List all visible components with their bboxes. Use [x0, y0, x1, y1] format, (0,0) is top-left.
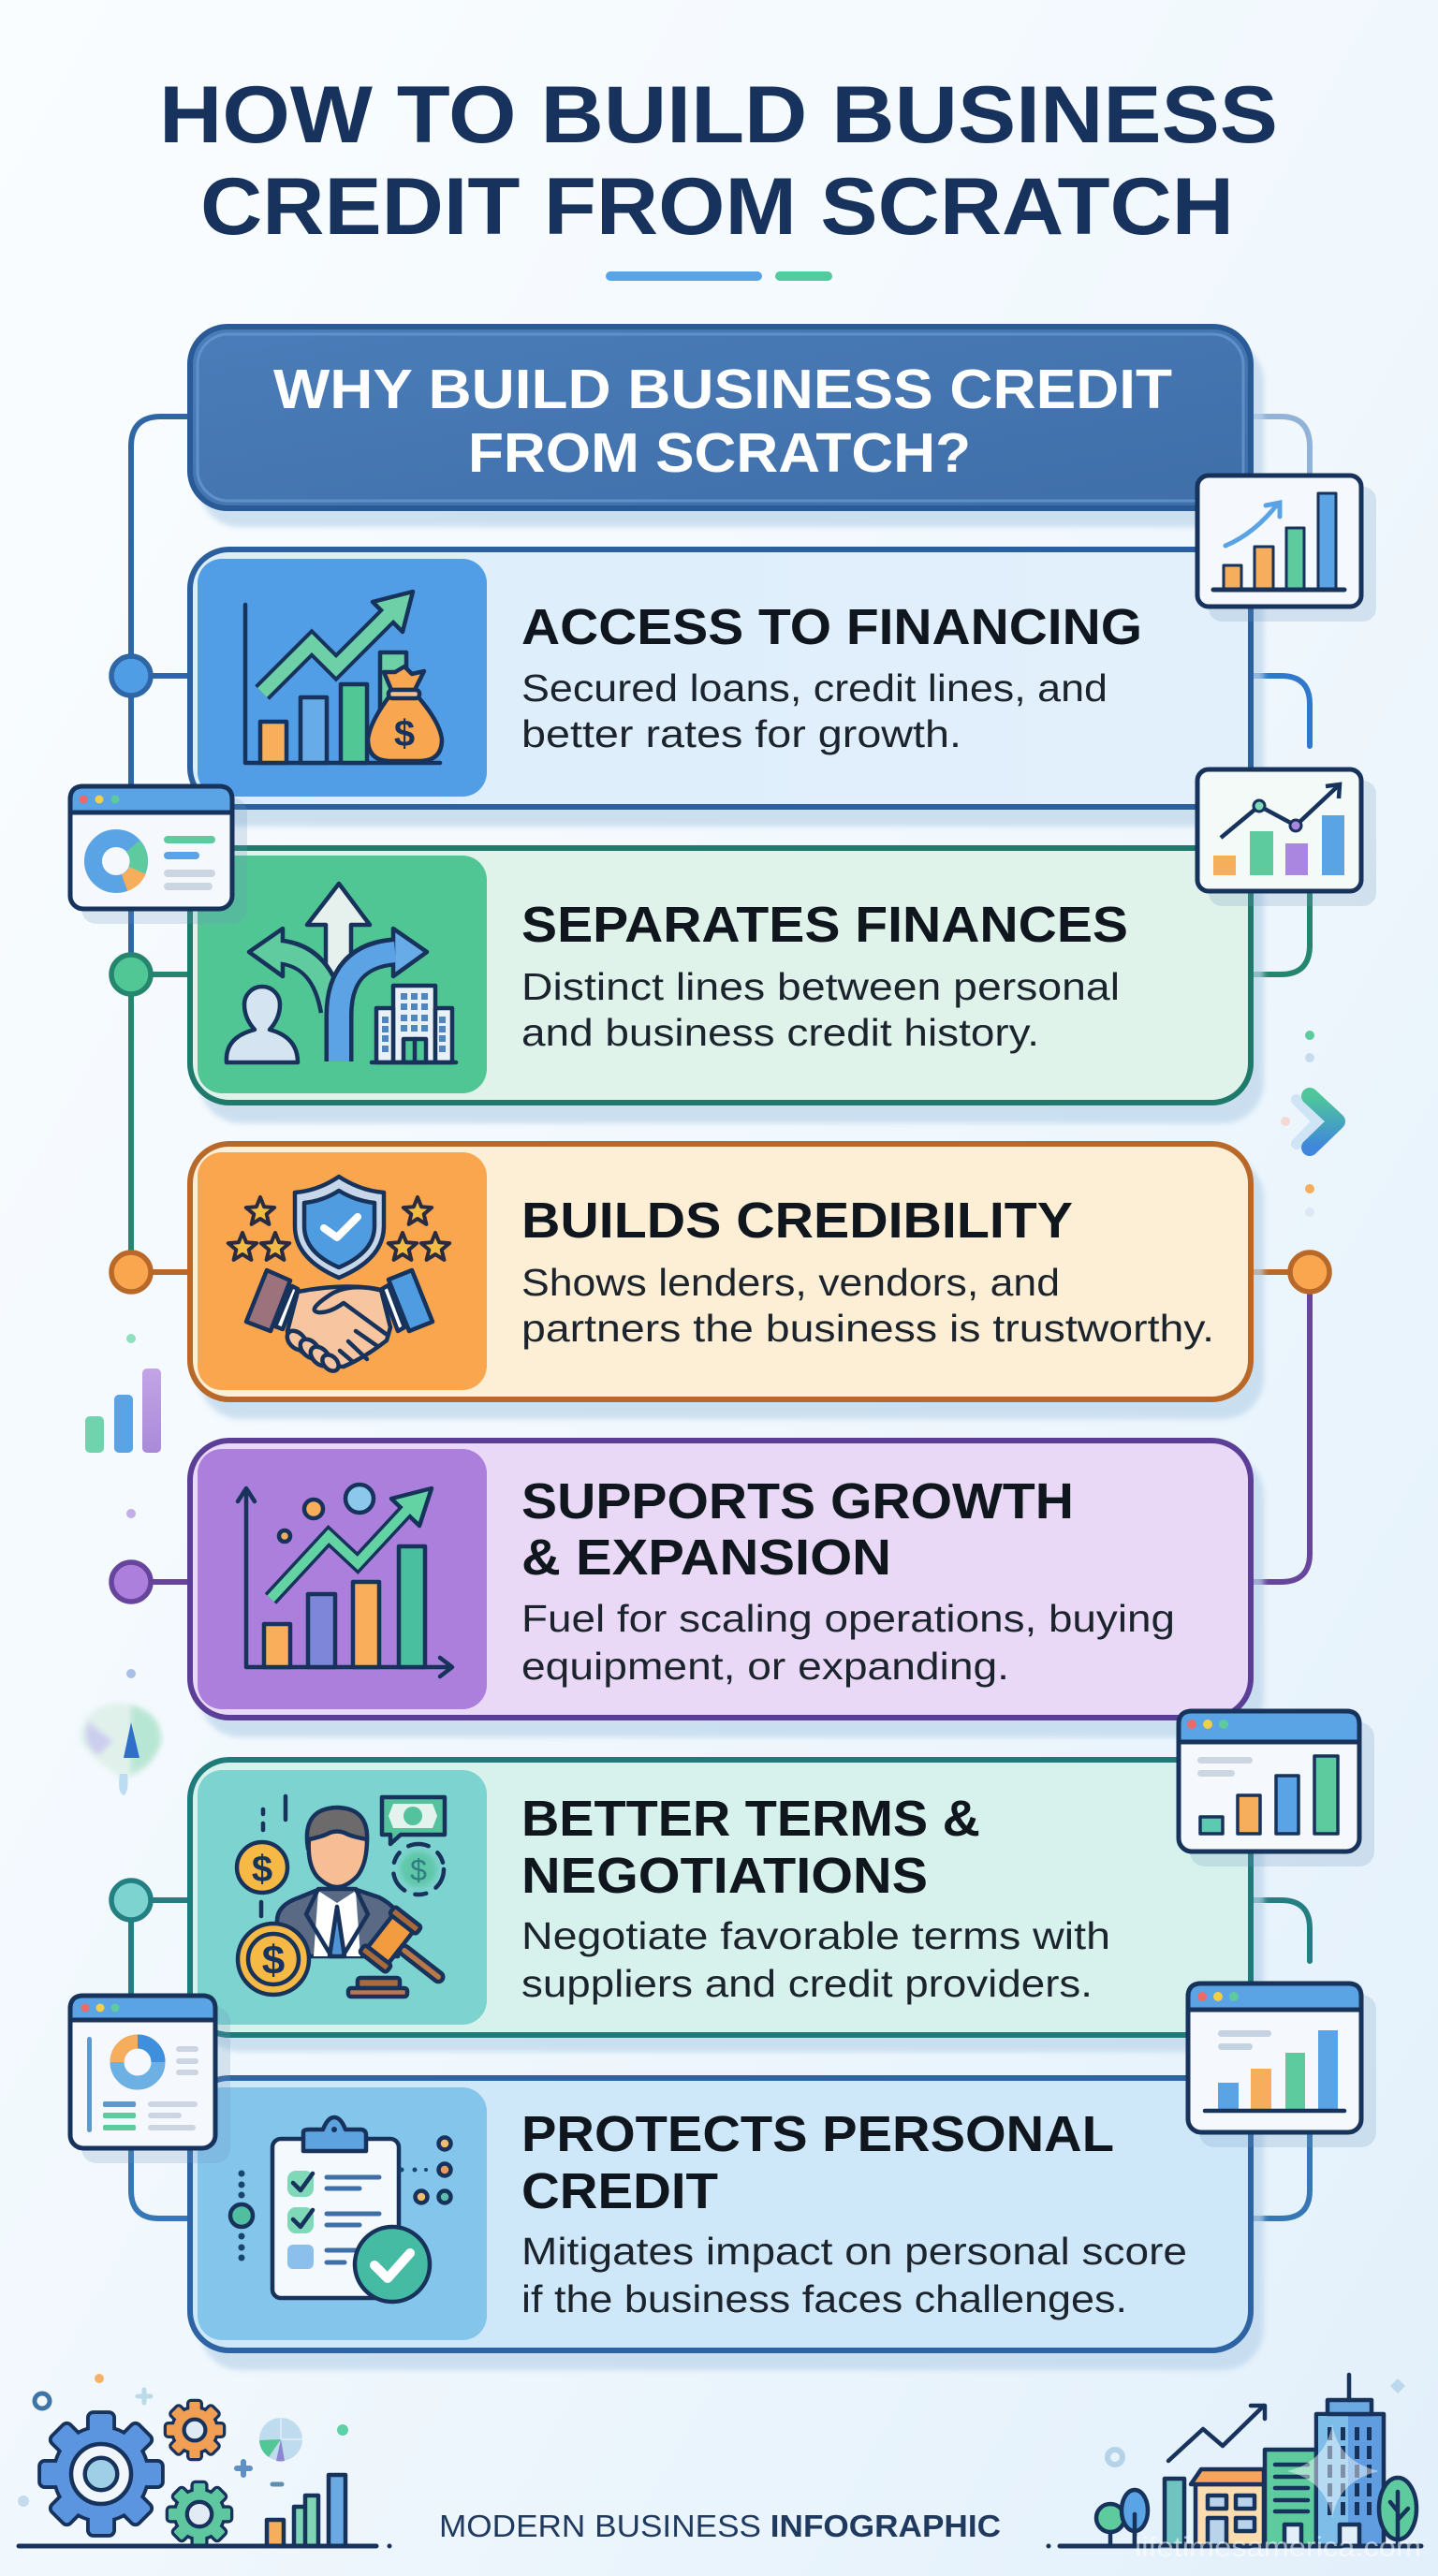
body text: Fuel for scaling operations, buying [521, 1597, 1175, 1640]
decoration: left small bars and dots [85, 1334, 161, 1678]
heading: SEPARATES FINANCES [521, 897, 1128, 953]
heading: CREDIT [521, 2163, 718, 2219]
heading: SUPPORTS GROWTH [521, 1473, 1074, 1530]
widget: left donut dashboard top [70, 786, 247, 924]
panel: better terms and negotiations [190, 1760, 1264, 2052]
icon: growth chart with money bag [245, 592, 442, 763]
icon: negotiator with coins and gavel: $ [262, 1938, 285, 1983]
body text [521, 1914, 1110, 2005]
heading: BETTER TERMS & [521, 1791, 980, 1847]
body text [521, 2230, 1187, 2320]
heading [521, 1473, 1074, 1586]
body text [521, 1261, 1214, 1350]
icon: negotiator with coins and gavel [237, 1796, 460, 2003]
heading [521, 1791, 980, 1904]
decoration: left compass blob [80, 1703, 161, 1795]
header text: FROM SCRATCH? [468, 422, 971, 484]
body text [521, 1597, 1175, 1688]
body text: equipment, or expanding. [521, 1645, 1009, 1688]
widget: left donut dashboard bottom [70, 1996, 230, 2163]
widget: right line and bar chart [1197, 769, 1376, 906]
body text: Secured loans, credit lines, and [521, 666, 1108, 710]
heading [521, 2106, 1114, 2219]
heading: PROTECTS PERSONAL [521, 2106, 1114, 2162]
icon: growth chart with bubbles [238, 1485, 452, 1676]
body text: better rates for growth. [521, 712, 961, 755]
icon: green gear [169, 2483, 230, 2545]
decoration: right chevron and dots [1281, 1031, 1337, 1217]
panel: access to financing [190, 549, 1264, 827]
body text: suppliers and credit providers. [521, 1962, 1093, 2005]
panel: builds credibility [190, 1144, 1264, 1419]
header text: WHY BUILD BUSINESS CREDIT [273, 359, 1172, 420]
body text: Mitigates impact on personal score [521, 2230, 1187, 2273]
connector lines [131, 417, 1310, 2218]
panel: supports growth and expansion [190, 1441, 1264, 1737]
heading: NEGOTIATIONS [521, 1848, 928, 1904]
widget: right bar chart with arrow [1197, 476, 1376, 622]
icon: growth chart with money bag: $ [394, 713, 415, 754]
icon: checklist clipboard [230, 2117, 451, 2302]
body text: and business credit history. [521, 1011, 1039, 1054]
panel: separates finances [190, 848, 1264, 1123]
icon: pie chart [259, 2418, 302, 2461]
footer illustration: city skyline [1047, 2375, 1421, 2563]
connector nodes [111, 656, 1329, 1920]
icon: diverging arrows with person and building [227, 884, 456, 1062]
body text [521, 666, 1108, 755]
icon: shield, stars and handshake [228, 1177, 449, 1374]
title: HOW TO BUILD BUSINESS [159, 70, 1278, 160]
watermark: lifetimesamerica.com [1135, 2532, 1421, 2563]
title: CREDIT FROM SCRATCH [200, 162, 1234, 252]
icon: large blue gear [41, 2414, 161, 2534]
panel: header [190, 327, 1264, 527]
icon: negotiator with coins and gavel: $ [252, 1849, 272, 1890]
heading: ACCESS TO FINANCING [521, 599, 1142, 655]
body text: if the business faces challenges. [521, 2277, 1127, 2320]
body text: Distinct lines between personal [521, 965, 1120, 1008]
header text [273, 359, 1172, 484]
body text: partners the business is trustworthy. [521, 1307, 1214, 1350]
body text: Shows lenders, vendors, and [521, 1261, 1060, 1304]
body text: Negotiate favorable terms with [521, 1914, 1110, 1957]
icon: negotiator with coins and gavel: $ [410, 1853, 427, 1887]
panel: protects personal credit [190, 2078, 1264, 2370]
title [159, 70, 1278, 252]
heading: & EXPANSION [521, 1530, 891, 1586]
footer illustration: gears and bars [18, 2374, 391, 2548]
heading: BUILDS CREDIBILITY [521, 1193, 1073, 1249]
title divider [606, 271, 832, 281]
body text [521, 965, 1120, 1054]
widget: right dashboard growth bars [1188, 1983, 1376, 2147]
footer text: MODERN BUSINESS INFOGRAPHIC [439, 2509, 1001, 2543]
icon: orange gear [167, 2402, 223, 2458]
widget: right dashboard bars [1179, 1711, 1374, 1866]
